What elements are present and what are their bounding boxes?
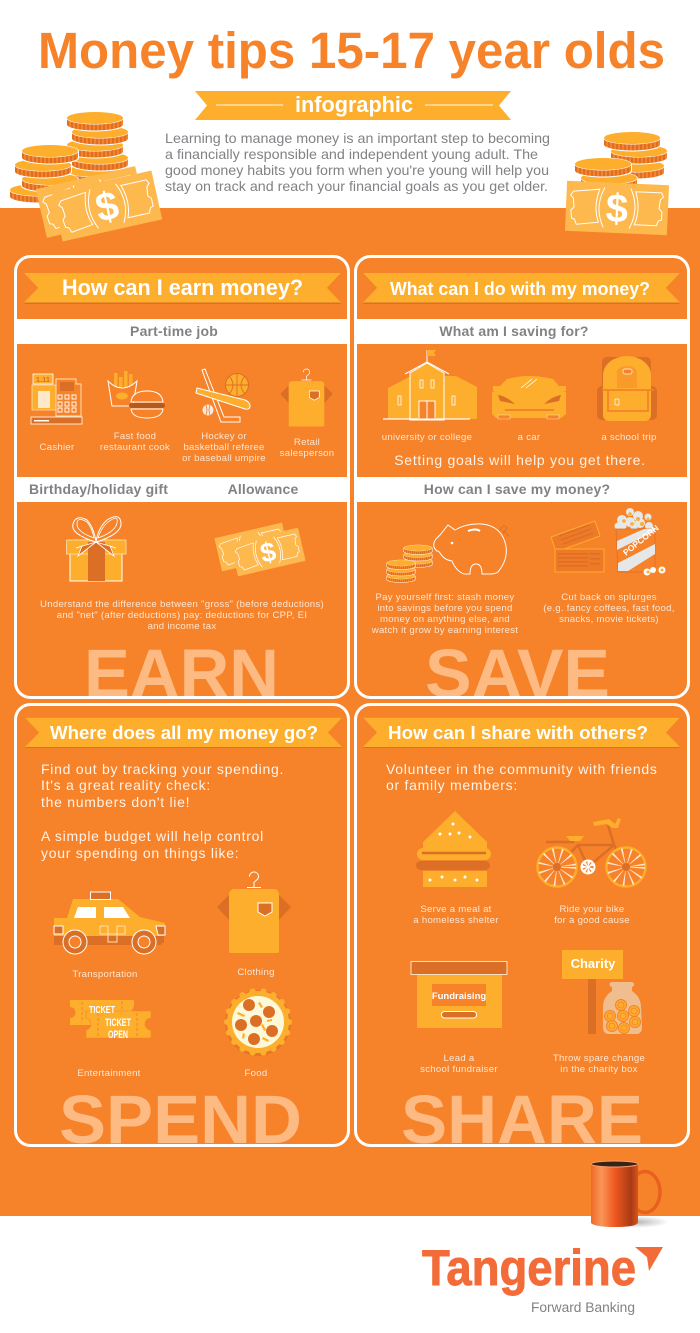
label: retail: salesperson — [280, 448, 334, 459]
label: entertainment: Entertainment — [77, 1068, 141, 1079]
banner: where does my money go: Where does all my money go? — [50, 723, 318, 743]
icon: charity sign and jar: Charity — [571, 956, 616, 971]
text: simple budget — [41, 828, 264, 861]
icon: tickets: TICKET — [105, 1017, 131, 1029]
icon: t-shirt — [280, 369, 333, 427]
icon: allowance bills: $ — [257, 535, 279, 569]
text: pay yourself first — [371, 592, 518, 636]
logo: Tangerine: Tangerine — [422, 1240, 636, 1296]
label: throw spare change: in the charity box — [560, 1064, 638, 1075]
icon: taxi — [54, 892, 165, 954]
text: cut back on splurges — [543, 592, 675, 625]
label: retail — [280, 437, 334, 459]
label: food: Food — [245, 1068, 267, 1079]
text: gross vs net: and income tax — [148, 621, 216, 632]
intro text: stay on track and reach your financial goals as you get older. — [165, 178, 548, 194]
heading: part-time job: Part-time job — [130, 323, 218, 339]
title: Money tips 15-17 year olds — [38, 22, 665, 79]
icon: school — [383, 350, 477, 420]
text: pay yourself first: into savings before you spend — [377, 603, 513, 614]
panel: share — [356, 704, 688, 1158]
text: volunteer — [386, 761, 658, 793]
text: gross vs net: and "net" (after deductions) pay: deductions for CPP, EI — [57, 610, 307, 621]
heading: allowance: Allowance — [228, 481, 298, 497]
banner: how can I earn money — [24, 273, 341, 304]
big word: spend: SPEND — [59, 1081, 302, 1158]
text: simple budget: your spending on things like: — [41, 845, 239, 861]
label: referee: Hockey or — [201, 431, 247, 442]
icon: popcorn: POPCORN — [621, 523, 661, 558]
banner: how can I share: How can I share with others? — [388, 723, 648, 743]
banner: what can I do — [363, 273, 680, 304]
text: tracking your spending: Find out by tracking your spending. — [41, 761, 284, 777]
text: pay yourself first: Pay yourself first: stash money — [375, 592, 515, 603]
label: fast food cook — [100, 431, 170, 453]
heading: birthday/holiday gift: Birthday/holiday gift — [29, 481, 168, 497]
text: tracking your spending: It's a great reality check: — [41, 777, 211, 793]
label: transportation: Transportation — [72, 969, 138, 980]
icon: charity sign and jar — [562, 950, 642, 1034]
text: pay yourself first: watch it grow by earning interest — [371, 625, 518, 636]
icon: coffee mug — [591, 1161, 669, 1228]
heading: how can I save: How can I save my money? — [424, 481, 610, 497]
label: ride your bike: Ride your bike — [559, 904, 625, 915]
icon: backpack — [597, 356, 657, 421]
label: serve a meal: Serve a meal at — [420, 904, 492, 915]
text: cut back on splurges: snacks, movie tickets) — [559, 614, 659, 625]
icon: fundraising box: Fundraising — [432, 991, 486, 1002]
orange background band — [0, 208, 700, 1216]
icon: tickets — [70, 1000, 151, 1041]
text: tracking your spending: the numbers don't lie! — [41, 794, 190, 810]
banner: how can I share — [363, 717, 680, 748]
label: lead a fundraiser: Lead a — [444, 1053, 475, 1064]
label: throw spare change: Throw spare change — [553, 1053, 645, 1064]
banner: where does my money go — [25, 717, 342, 748]
icon: piggy bank — [434, 524, 509, 574]
label: ride your bike: for a good cause — [554, 915, 630, 926]
text: volunteer: Volunteer in the community with friends — [386, 761, 658, 777]
big word: share: SHARE — [401, 1081, 643, 1158]
banner: what can I do: What can I do with my money? — [390, 279, 650, 299]
icon: gift — [66, 517, 126, 581]
text: cut back on splurges: Cut back on splurges — [561, 592, 657, 603]
tagline: Forward Banking — [531, 1300, 635, 1315]
icon: car — [492, 376, 566, 419]
label: university: university or college — [382, 432, 472, 443]
icon: tickets: OPEN — [108, 1029, 128, 1041]
label: fast food cook: Fast food — [114, 431, 156, 442]
label: ride your bike — [554, 904, 630, 926]
banner: how can I earn money: How can I earn money? — [62, 275, 303, 300]
text: pay yourself first: money on anything else, and — [380, 614, 510, 625]
label: serve a meal: a homeless shelter — [413, 915, 499, 926]
icon: cash register — [31, 374, 82, 424]
icon: pizza — [225, 990, 291, 1056]
label: serve a meal — [413, 904, 499, 926]
label: referee: basketball referee — [183, 442, 265, 453]
label: lead a fundraiser: school fundraiser — [420, 1064, 498, 1075]
label: referee — [182, 431, 266, 464]
label: cashier: Cashier — [40, 442, 75, 453]
intro text: Learning to manage money is an important step to becoming — [165, 130, 550, 146]
icon: popcorn — [614, 508, 666, 576]
panel: save — [356, 256, 688, 712]
panel: earn — [16, 256, 348, 712]
label: retail: Retail — [294, 437, 320, 448]
label: car: a car — [518, 432, 541, 443]
text: volunteer: or family members: — [386, 777, 518, 793]
icon: bicycle — [538, 818, 646, 886]
banner: infographic — [195, 91, 511, 120]
icon: clothing — [217, 872, 291, 953]
text: tracking your spending — [41, 761, 284, 810]
icon: cash register: 1.11 — [36, 375, 50, 384]
icon: right coins and bill — [565, 132, 669, 235]
icon: coins small — [386, 545, 432, 583]
icon: fries and burger — [108, 371, 165, 418]
icon: tickets: TICKET — [89, 1005, 115, 1016]
text: cut back on splurges: (e.g. fancy coffees, fast food, — [543, 603, 675, 614]
intro text: a financially responsible and independent young adult. The — [165, 146, 538, 162]
label: referee: or baseball umpire — [182, 453, 266, 464]
label: throw spare change — [553, 1053, 645, 1075]
text: gross vs net: Understand the difference between "gross" (before deductions) — [40, 599, 324, 610]
label: lead a fundraiser — [420, 1053, 498, 1075]
banner: infographic: infographic — [295, 92, 413, 117]
intro text — [165, 130, 550, 194]
icon: left coins and bills: $ — [92, 183, 123, 231]
icon: fundraising box — [411, 962, 507, 1028]
icon: left coins and bills — [9, 112, 162, 241]
heading: what am I saving for: What am I saving for? — [439, 323, 589, 339]
panel: spend — [16, 704, 348, 1158]
icon: movie tickets — [551, 521, 604, 572]
label: clothing: Clothing — [237, 967, 275, 978]
icon: right coins and bill: $ — [605, 187, 629, 231]
icon: sandwich — [416, 811, 491, 887]
text: setting goals: Setting goals will help you get there. — [394, 452, 646, 468]
icon: allowance bills — [214, 523, 306, 576]
icon: sports gear — [196, 369, 250, 422]
text: simple budget: A simple budget will help control — [41, 828, 264, 844]
label: fast food cook: restaurant cook — [100, 442, 170, 453]
label: school trip: a school trip — [601, 432, 657, 443]
intro text: good money habits you form when you're young will help you — [165, 162, 549, 178]
big word: earn: EARN — [84, 635, 279, 712]
text: gross vs net — [40, 599, 324, 632]
big word: save: SAVE — [425, 635, 610, 712]
